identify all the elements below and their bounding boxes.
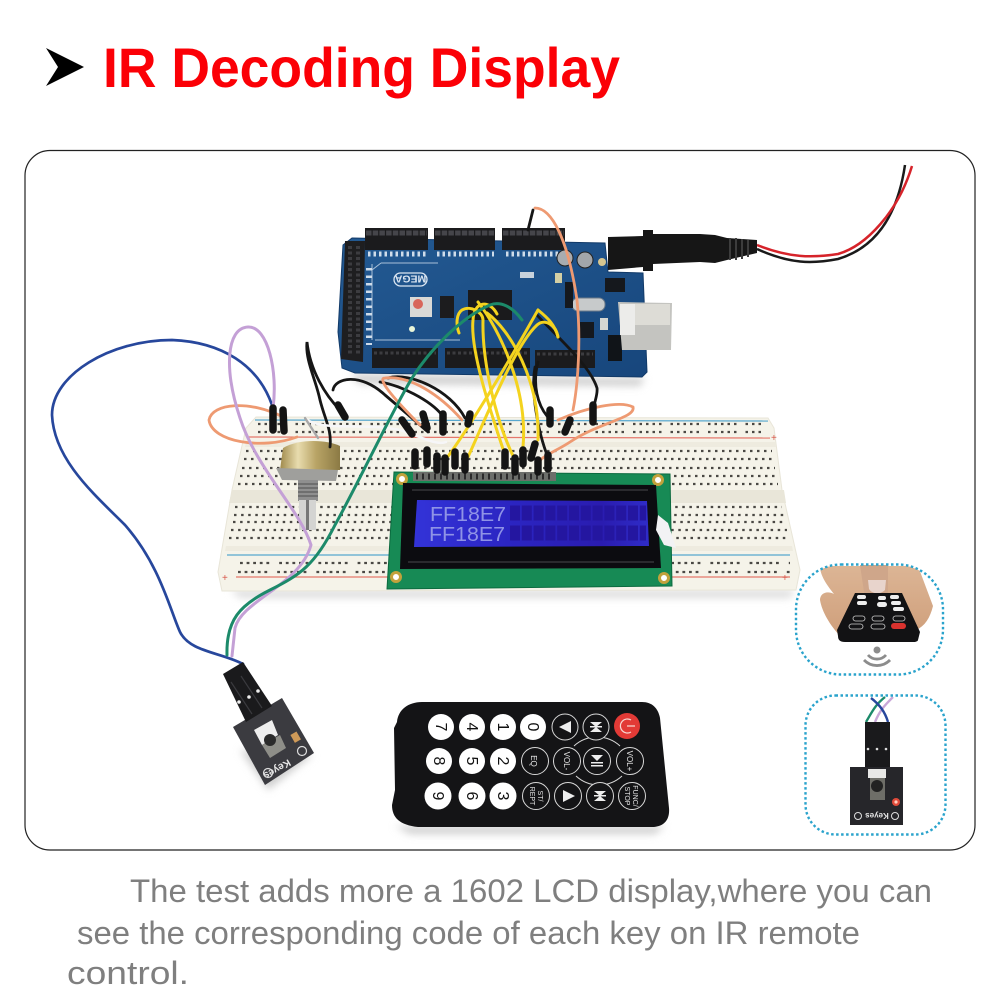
capacitors bbox=[557, 250, 606, 268]
breadboard bbox=[218, 417, 800, 591]
LCD 1602 module bbox=[387, 472, 676, 589]
module PCB bbox=[233, 698, 314, 785]
icon: infrared signal bbox=[864, 646, 890, 666]
remote keys bbox=[857, 595, 904, 611]
description text: The test adds more a 1602 LCD display,where you can bbox=[130, 873, 932, 909]
DC power plug and cable bbox=[608, 165, 912, 271]
key digits: 9 bbox=[429, 792, 446, 801]
receiver sensor bbox=[868, 769, 886, 800]
LCD readout: FF18E7 bbox=[430, 504, 506, 526]
key digits: 2 bbox=[494, 757, 511, 766]
breadboard: + bbox=[771, 433, 777, 444]
description text bbox=[67, 873, 932, 991]
key labels: VOL+ bbox=[625, 751, 634, 772]
LED bbox=[409, 326, 415, 332]
key digits: 8 bbox=[430, 757, 447, 766]
dashed frame bbox=[796, 564, 943, 674]
IR remote control bbox=[392, 702, 669, 827]
outlined function keys bbox=[522, 714, 646, 810]
key glyphs bbox=[559, 721, 606, 802]
dim character cells bbox=[510, 513, 646, 533]
key digits bbox=[429, 723, 541, 801]
key digits: 5 bbox=[463, 757, 480, 766]
blue screen bbox=[414, 500, 649, 547]
receiver label: Keyes bbox=[865, 811, 889, 820]
regulators and small components bbox=[520, 272, 625, 361]
icon: chevron arrow bbox=[46, 48, 84, 86]
key labels: FUNC/ bbox=[631, 785, 638, 807]
black jumpers under yellow bbox=[307, 210, 597, 462]
remote body bbox=[392, 702, 669, 827]
inset: hand pressing remote bbox=[796, 564, 943, 674]
white tape bbox=[656, 515, 676, 548]
orange jumpers bbox=[209, 208, 633, 466]
crystal bbox=[572, 298, 605, 311]
key digits: 3 bbox=[494, 792, 511, 801]
header connector bbox=[223, 662, 272, 722]
microcontroller chip bbox=[468, 290, 512, 320]
description text: see the corresponding code of each key on IR remote bbox=[77, 915, 860, 951]
key labels: VOL- bbox=[562, 752, 571, 771]
black bezel bbox=[400, 483, 661, 569]
green PCB bbox=[387, 472, 672, 589]
top pin headers bbox=[365, 228, 565, 250]
potentiometer bbox=[276, 441, 340, 530]
key digits: 6 bbox=[463, 792, 480, 801]
white wire bbox=[305, 418, 446, 443]
dashed frame bbox=[806, 696, 946, 834]
receiver PCB bbox=[850, 767, 903, 825]
blue wire bbox=[52, 340, 272, 664]
remote power key bbox=[891, 623, 906, 629]
key labels: EQ bbox=[529, 755, 538, 767]
jumper wires bbox=[52, 208, 633, 664]
green wire bbox=[227, 304, 522, 655]
description text: control. bbox=[67, 955, 189, 991]
key labels: STOP bbox=[623, 787, 630, 806]
purple wire bbox=[230, 327, 311, 656]
remote outlined keys bbox=[849, 616, 905, 629]
key labels: REPT bbox=[528, 787, 535, 806]
IR sensor bbox=[254, 720, 286, 758]
receiver wires bbox=[866, 697, 893, 722]
heading bbox=[46, 36, 620, 99]
key digits: 0 bbox=[524, 723, 541, 732]
side and bottom pin headers bbox=[341, 241, 595, 368]
breadboard: + bbox=[222, 573, 228, 584]
key digits: 1 bbox=[494, 723, 511, 732]
yellow wires bbox=[443, 302, 558, 463]
silkscreen logo: MEGA bbox=[394, 272, 426, 284]
key digits: 4 bbox=[463, 723, 480, 732]
key digits: 7 bbox=[432, 723, 449, 732]
Arduino Mega board bbox=[338, 228, 672, 377]
jumper connector heads bbox=[273, 405, 593, 472]
title: IR Decoding Display bbox=[103, 36, 620, 99]
power key bbox=[614, 713, 640, 739]
receiver connector bbox=[865, 722, 890, 767]
panel: photo frame bbox=[25, 150, 975, 850]
indicator LED bbox=[290, 732, 301, 743]
module label: Keyes bbox=[261, 756, 292, 781]
lit LED bbox=[892, 798, 900, 806]
pin header bbox=[413, 472, 556, 481]
IR receiver module bbox=[223, 662, 314, 785]
soft shadows bbox=[230, 374, 795, 834]
hand and remote photo bbox=[820, 565, 933, 642]
silk pin labels and outline bbox=[368, 252, 562, 256]
USB port bbox=[618, 302, 672, 350]
breadboard: + bbox=[782, 573, 788, 584]
key labels: ST/ bbox=[536, 791, 543, 801]
mounting holes bbox=[392, 474, 668, 582]
key labels bbox=[528, 751, 638, 807]
number keys bbox=[424, 714, 546, 810]
reset button bbox=[410, 297, 432, 317]
inset: IR receiver close-up bbox=[806, 696, 946, 834]
LCD readout: FF18E7 bbox=[429, 524, 505, 546]
